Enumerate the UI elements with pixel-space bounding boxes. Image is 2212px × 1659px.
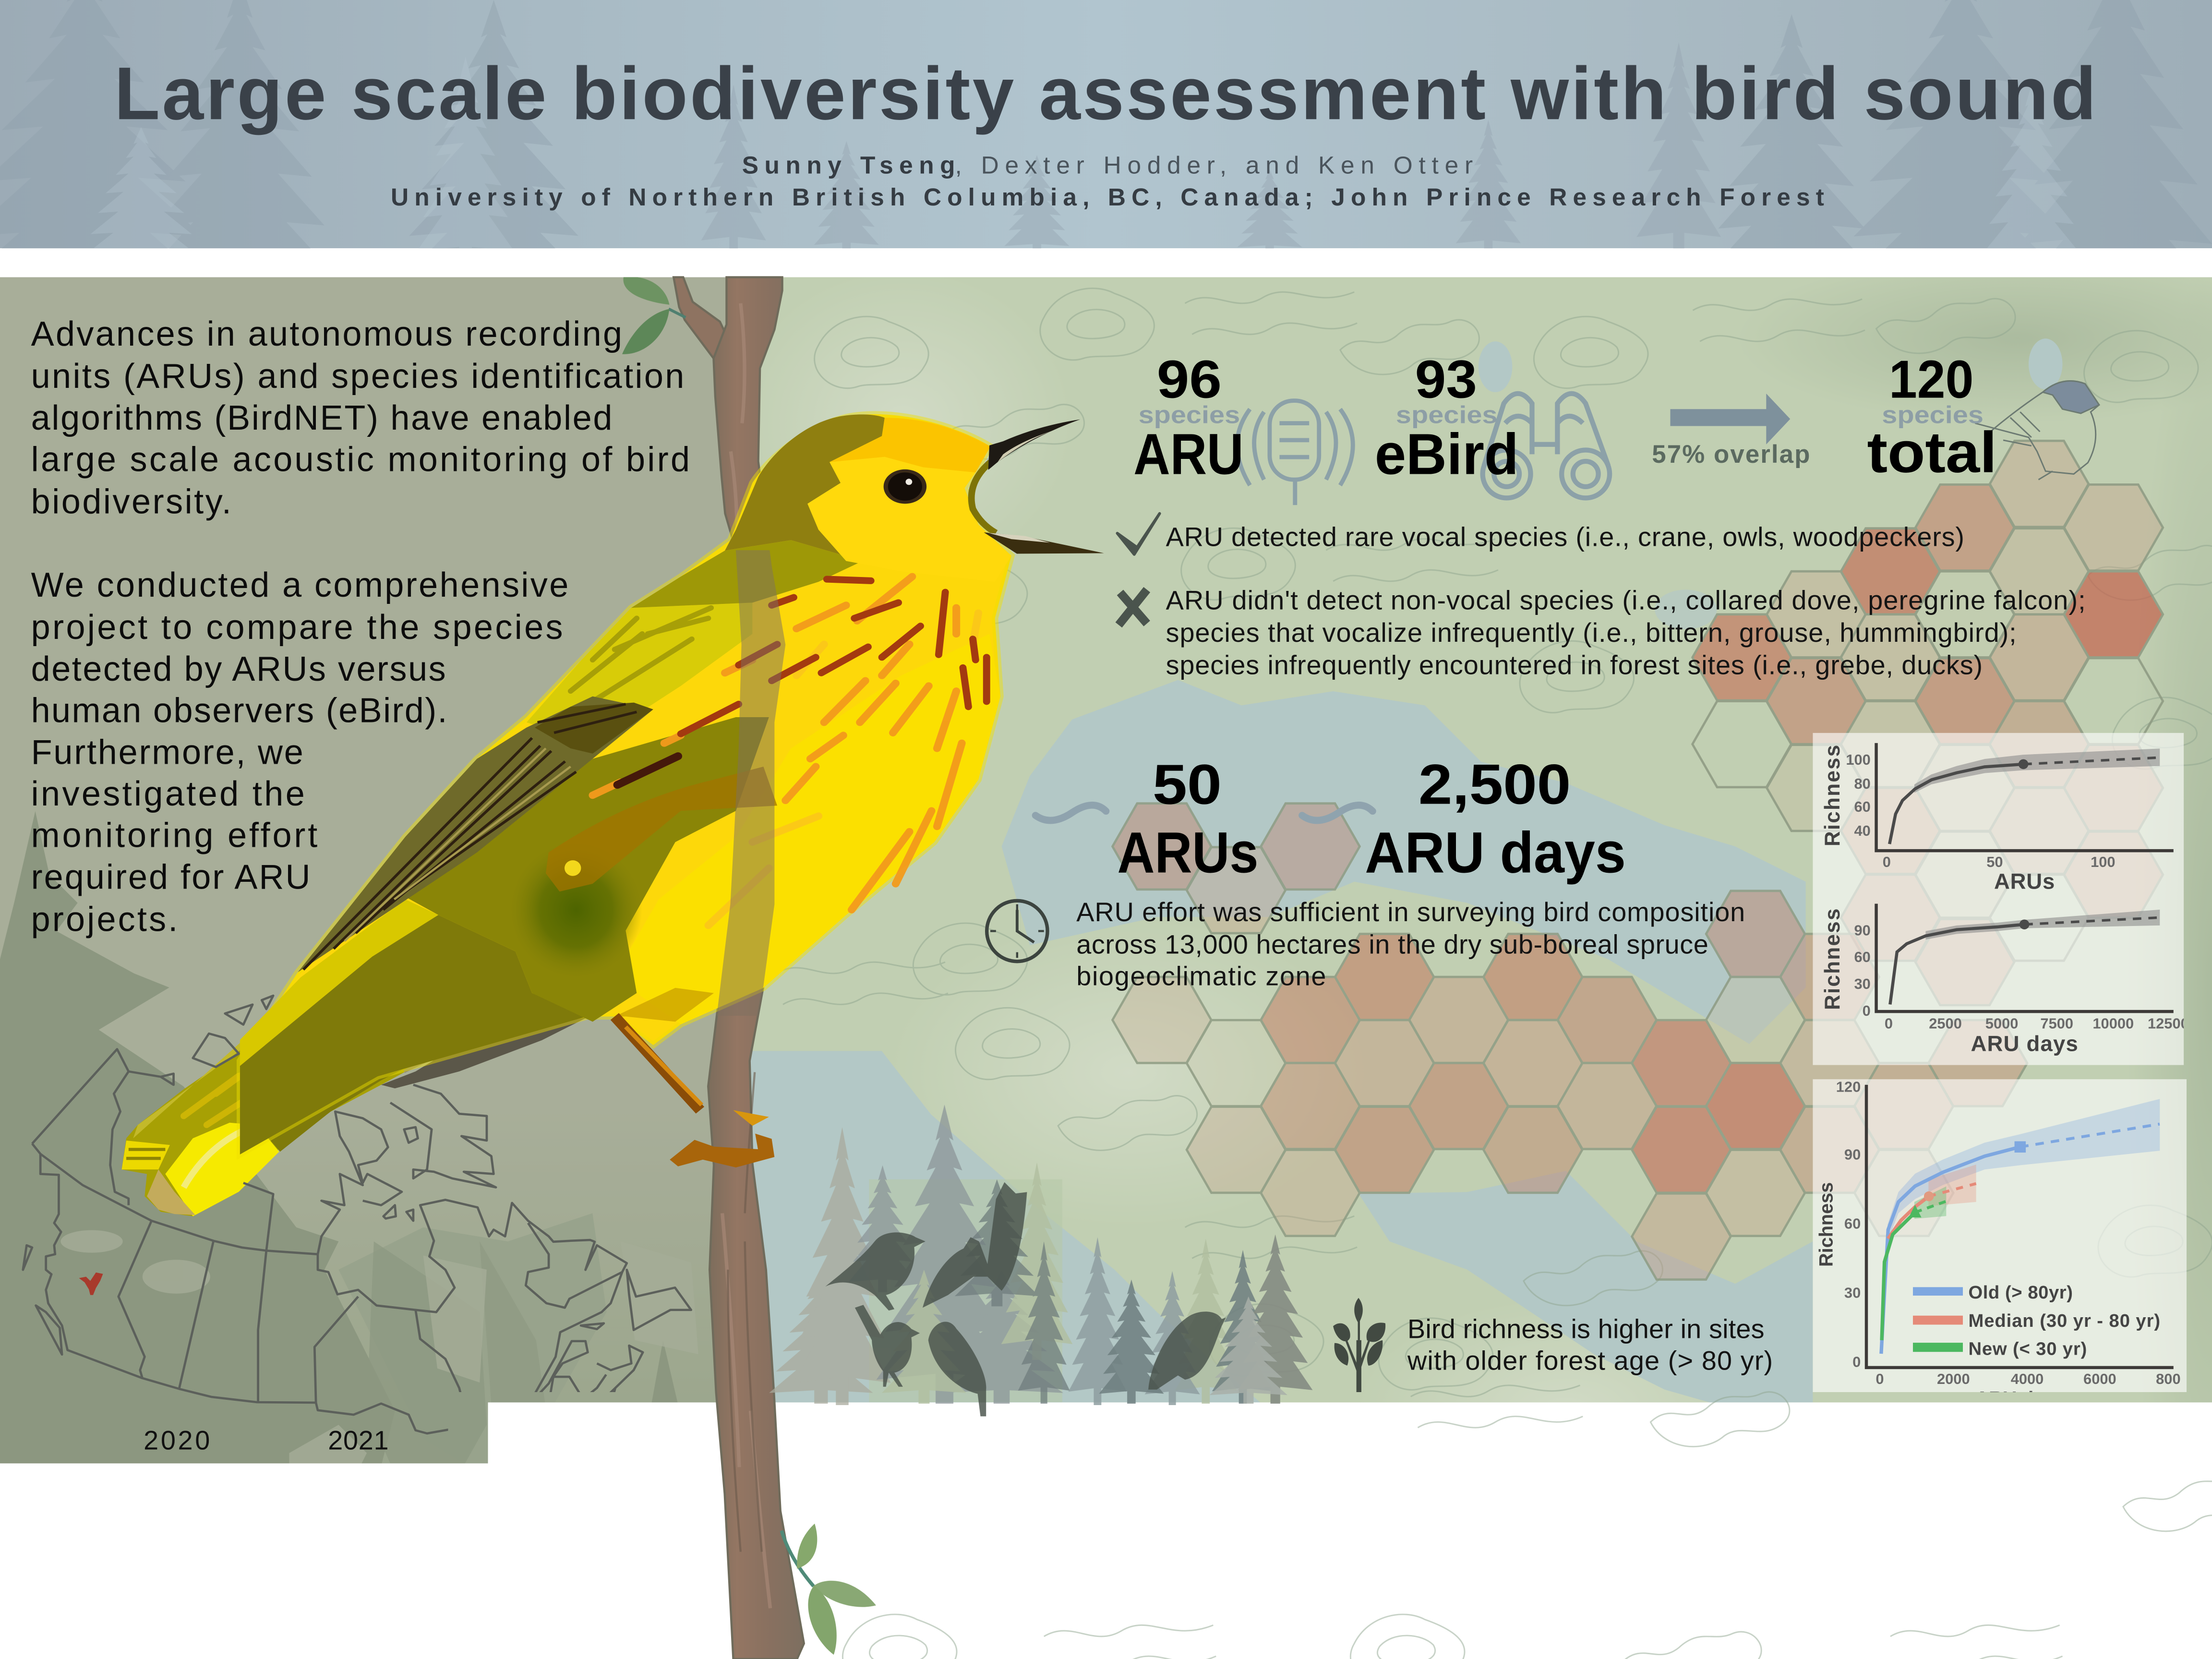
icon: cross mark	[1118, 589, 1147, 625]
intro paragraph: algorithms (BirdNET) have enabled	[31, 399, 612, 437]
lower bill	[984, 532, 1104, 553]
stat: 2,500 ARU days: ARU days	[1365, 820, 1626, 885]
upper wing coverts	[527, 602, 752, 743]
icon: clock	[987, 901, 1047, 962]
branch and trunk	[673, 277, 804, 1659]
primaries	[298, 697, 653, 972]
methods paragraph: projects.	[31, 901, 178, 939]
forest age text	[1407, 1313, 1773, 1376]
chart panel: forest age curves: 30	[1844, 1285, 1861, 1301]
chart: richness vs ARU days: 10000	[2092, 1015, 2134, 1032]
chart panel: forest age curves	[1813, 1079, 2187, 1411]
bird: body	[240, 414, 1104, 1167]
methods paragraph: project to compare the species	[31, 608, 563, 647]
effort text: ARU effort was sufficient in surveying bird composition	[1076, 897, 1745, 927]
icon: squiggle left	[1035, 805, 1106, 820]
icon: microphone	[1237, 401, 1353, 505]
chart: richness vs ARU days	[1821, 904, 2189, 1056]
icon: binoculars	[1483, 394, 1610, 498]
chart: richness vs ARU days: 30	[1854, 975, 1871, 992]
trunk overlay across bird	[705, 550, 804, 1016]
chart panel: forest age curves: 0	[1875, 1370, 1884, 1387]
bird silhouettes	[825, 1182, 1226, 1417]
authors: Sunny Tseng	[742, 151, 955, 179]
stat: total species: species	[1882, 401, 1984, 429]
methods paragraph: monitoring effort	[31, 817, 317, 855]
chart: richness vs ARU days: 12500	[2148, 1015, 2189, 1032]
intro paragraph	[31, 315, 690, 521]
arrow: overlap	[1671, 394, 1790, 445]
chart: richness vs ARU days: 0	[1885, 1015, 1893, 1032]
rump	[240, 899, 438, 1066]
eye	[884, 469, 926, 504]
icon: squiggle right	[1302, 805, 1372, 820]
chart panel: forest age curves: 120	[1836, 1079, 1861, 1095]
stat: recorders: recorders	[267, 1580, 448, 1621]
topographic contours	[762, 289, 2212, 1659]
stat: total species: total	[1867, 420, 1997, 485]
stat: eBird species: 93	[1415, 349, 1477, 409]
stat: ARU species: 96	[1157, 349, 1222, 409]
header banner: misty forest	[0, 0, 2212, 338]
chart: richness vs ARUs: 100	[1846, 751, 1871, 768]
methods paragraph: investigated the	[31, 775, 305, 813]
chart panel: forest age curves: 90	[1844, 1146, 1861, 1163]
stat: ARU species	[1133, 349, 1353, 505]
nape and back	[725, 414, 885, 561]
icon: sapling	[1333, 1298, 1385, 1393]
chart panel: forest age curves: 4000	[2011, 1370, 2044, 1387]
confidence bands	[1887, 1099, 2160, 1241]
stat: eBird species: species	[1396, 401, 1498, 429]
icon: location bird	[79, 1273, 103, 1295]
authors: , Dexter Hodder, and Ken Otter	[955, 151, 1473, 179]
flank	[614, 988, 714, 1022]
chart: richness vs ARUs: 0	[1883, 854, 1891, 870]
stat: 50 ARUs	[1118, 753, 1258, 885]
stat: 2,500 ARU days	[1365, 753, 1626, 885]
conclusion panel: survey bird communities across a large spatiotemporal scale. Subsequent	[886, 1511, 2130, 1551]
methods paragraph: detected by ARUs versus	[31, 650, 446, 688]
streaks orange	[593, 577, 962, 910]
effort text	[1076, 897, 1745, 991]
face	[807, 457, 1011, 582]
stat: eBird species	[1375, 349, 1610, 498]
stat: eBird species: eBird	[1375, 421, 1519, 486]
stat: hectares: hectares	[36, 1580, 200, 1621]
chart: richness vs ARU days: ARU days	[1971, 1031, 2078, 1056]
chart panel: forest age curves: Richness	[1815, 1182, 1837, 1267]
forest age text: Bird richness is higher in sites	[1407, 1313, 1765, 1344]
conclusion panel	[823, 1425, 2188, 1636]
chart: richness vs ARUs	[1821, 743, 2174, 893]
methods paragraph	[31, 566, 568, 939]
non-vocal species finding: ARU didn't detect non-vocal species (i.e., collared dove, peregrine falcon);	[1166, 585, 2086, 615]
feet	[670, 1133, 774, 1167]
non-vocal species finding	[1166, 585, 2086, 680]
effort text: across 13,000 hectares in the dry sub-boreal spruce	[1076, 929, 1708, 960]
intro paragraph: Advances in autonomous recording	[31, 315, 622, 353]
hexagon grid: lower cluster	[1113, 804, 2027, 1279]
non-vocal species finding: species infrequently encountered in forest sites (i.e., grebe, ducks)	[1166, 650, 1983, 680]
olive back	[405, 717, 769, 1022]
methods paragraph: We conducted a comprehensive	[31, 566, 568, 604]
stat: recorders: 66	[336, 1533, 378, 1575]
legs	[614, 1016, 700, 1110]
timeline: 2021	[328, 1425, 389, 1455]
chart: richness vs ARUs: Richness	[1821, 745, 1844, 846]
stat: total species: 120	[1889, 349, 1973, 409]
non-vocal species finding: species that vocalize infrequently (i.e., bittern, grouse, hummingbird);	[1166, 617, 2017, 648]
chart panel: forest age curves: 60	[1844, 1215, 1861, 1232]
stat: seasons	[520, 1533, 673, 1621]
methods paragraph: human observers (eBird).	[31, 692, 447, 730]
icon: line-art bird	[1975, 381, 2099, 480]
Canada map	[23, 996, 691, 1491]
chart: richness vs ARU days: Richness	[1821, 909, 1844, 1010]
forest illustration	[769, 1105, 1312, 1405]
timeline: 2022	[506, 1425, 572, 1455]
chart: richness vs ARU days: 7500	[2040, 1015, 2073, 1032]
chart panel: forest age curves: 800	[2156, 1370, 2181, 1387]
effort text: biogeoclimatic zone	[1076, 961, 1326, 991]
stat: ARU species: ARU	[1133, 421, 1244, 486]
stat: recorders	[267, 1533, 448, 1621]
legend	[1913, 1282, 2160, 1359]
timeline	[82, 1425, 634, 1514]
conclusion panel: ARUs, combined with BirdNET, are a time-, cost-, and labor-efficient method to	[837, 1468, 2179, 1508]
stat: 50 ARUs: 50	[1153, 753, 1222, 816]
curves	[1881, 1147, 2020, 1354]
axes	[1866, 1085, 2174, 1368]
ground	[0, 1552, 750, 1659]
chart: richness vs ARUs: 50	[1986, 854, 2003, 870]
legend: Median (30 yr - 80 yr)	[1968, 1310, 2160, 1331]
stat: seasons: 3	[585, 1533, 606, 1575]
stat: hectares: 30,000	[54, 1533, 182, 1575]
chart: richness vs ARUs: 40	[1854, 822, 1871, 839]
affiliation: University of Northern British Columbia, BC, Canada; John Prince Research Forest	[391, 183, 1824, 211]
stat: 50 ARUs: ARUs	[1118, 820, 1258, 885]
conclusion panel: analysis will investigate important features for maintaining bird biodiversity.	[865, 1553, 2153, 1593]
icon: check mark	[1118, 514, 1160, 554]
forest age text: with older forest age (> 80 yr)	[1407, 1346, 1773, 1376]
stat: ARU species: species	[1139, 401, 1240, 429]
crown	[830, 418, 990, 472]
stat: total species	[1867, 349, 2099, 485]
methods paragraph: required for ARU	[31, 858, 311, 896]
map background	[677, 254, 2212, 1659]
chart panel: accumulation curves	[1813, 733, 2189, 1065]
legend: New (< 30 yr)	[1968, 1339, 2087, 1359]
intro paragraph: units (ARUs) and species identification	[31, 357, 684, 396]
57% overlap label: 57% overlap	[1652, 440, 1810, 469]
chart: richness vs ARU days: 90	[1854, 922, 1871, 938]
chart: richness vs ARU days: 2500	[1929, 1015, 1962, 1032]
hexagon grid: upper cluster	[1693, 441, 2163, 1005]
leaves: bottom	[781, 1524, 876, 1655]
gape	[972, 462, 996, 533]
shoulder patch	[546, 767, 777, 891]
lower belly	[625, 634, 1000, 1024]
methods paragraph: Furthermore, we	[31, 733, 303, 771]
chart: richness vs ARUs: 80	[1854, 775, 1871, 792]
intro paragraph: large scale acoustic monitoring of bird	[31, 441, 690, 479]
chart panel: forest age curves: 2000	[1937, 1370, 1970, 1387]
chart: richness vs ARU days: 60	[1854, 949, 1871, 965]
bird: tail	[121, 960, 634, 1216]
stat: hectares	[36, 1533, 200, 1621]
chart panel: forest age curves: ARU days	[1975, 1387, 2065, 1409]
intro paragraph: biodiversity.	[31, 483, 231, 521]
stat: seasons: seasons	[520, 1580, 673, 1621]
chart: richness vs ARUs: ARUs	[1994, 869, 2055, 893]
stat: 2,500 ARU days: 2,500	[1419, 753, 1571, 816]
legend: Old (> 80yr)	[1968, 1282, 2073, 1303]
left forest silhouettes	[0, 811, 508, 1560]
chart: richness vs ARUs: 100	[2091, 854, 2116, 870]
rare vocal species finding: ARU detected rare vocal species (i.e., crane, owls, woodpeckers)	[1166, 521, 1964, 552]
leaves: top	[622, 277, 685, 354]
chart: richness vs ARU days: 0	[1863, 1002, 1871, 1019]
streaks red	[681, 579, 986, 734]
chart panel: forest age curves: 0	[1852, 1354, 1861, 1370]
timeline: 2020	[144, 1425, 210, 1455]
left panel	[0, 276, 750, 1659]
chart panel: forest age curves: 6000	[2083, 1370, 2116, 1387]
upper bill	[988, 420, 1080, 470]
title: Large scale biodiversity assessment with bird sound	[114, 52, 2096, 135]
lakes	[748, 338, 2062, 1659]
chart: richness vs ARUs: 60	[1854, 798, 1871, 815]
chart: richness vs ARU days: 5000	[1985, 1015, 2018, 1032]
